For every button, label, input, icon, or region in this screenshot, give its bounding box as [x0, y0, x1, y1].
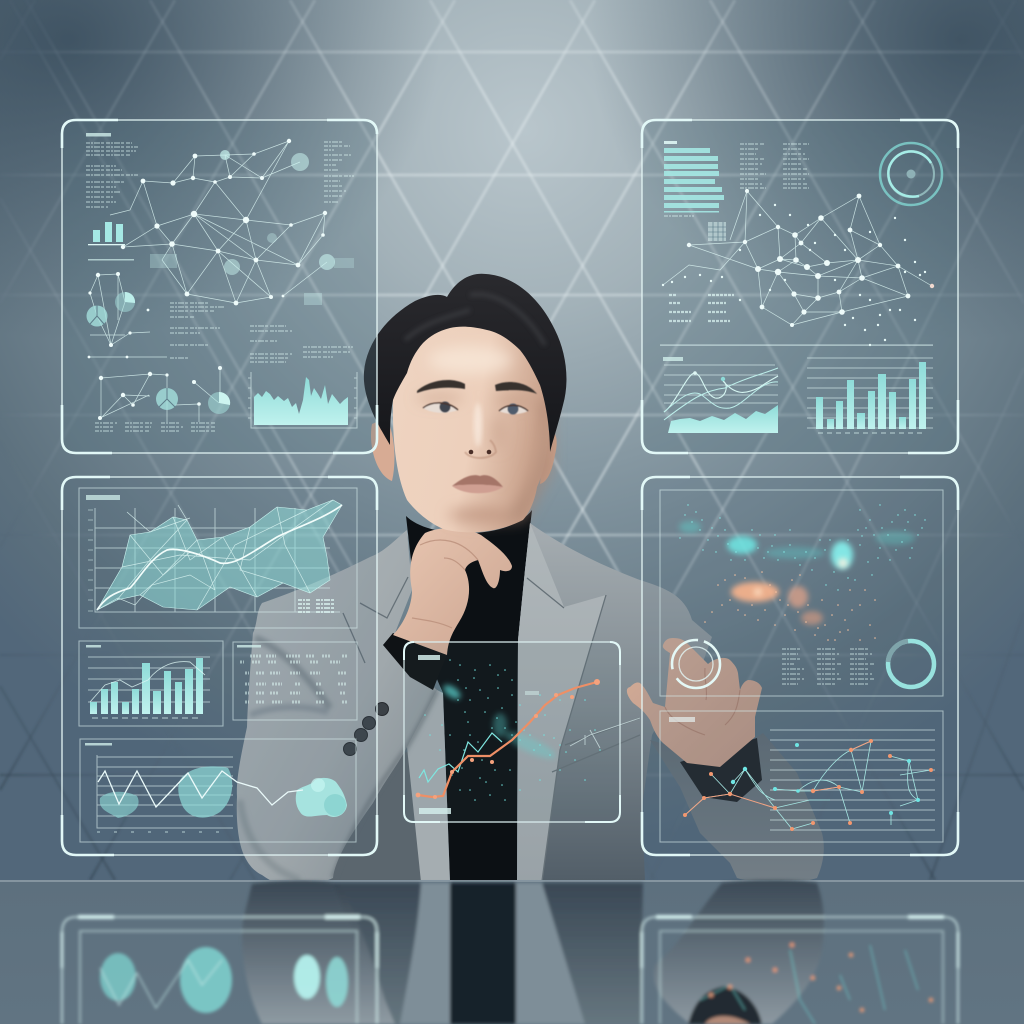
reflected torso [333, 883, 643, 1024]
panel frame [62, 120, 377, 453]
jacket fold shading [240, 638, 437, 880]
lower frame [660, 711, 943, 842]
torso right side [517, 523, 712, 881]
text columns [664, 144, 809, 216]
panel labels [418, 655, 539, 814]
small table [669, 295, 734, 321]
blob chart frame [80, 739, 356, 842]
network line chart [683, 730, 935, 831]
reflected right panel [642, 917, 958, 1024]
man [237, 274, 824, 886]
panel: top-left network [62, 120, 377, 453]
right hand [627, 638, 762, 767]
blob cluster [296, 778, 347, 817]
label [669, 717, 695, 722]
text columns [782, 649, 874, 684]
teal mesh surface [97, 500, 342, 610]
network graph [110, 139, 354, 305]
nose [465, 403, 496, 458]
reflected left panel [62, 917, 377, 1024]
panel frame [642, 477, 958, 855]
lapel lines [343, 577, 640, 881]
bar chart frame [79, 641, 223, 726]
left cuff [383, 633, 447, 690]
reflected left sleeve [242, 881, 395, 1024]
face [393, 305, 548, 532]
horizontal bars [664, 141, 724, 212]
divider [660, 344, 933, 346]
panel: bottom-right charts [642, 477, 958, 855]
small line icon [570, 718, 640, 748]
eyes [423, 402, 528, 414]
panel: top-right network [642, 120, 958, 453]
node clusters [150, 150, 354, 305]
floating centre panel [404, 642, 640, 822]
table top [0, 880, 1024, 1024]
line and area chart [663, 357, 778, 433]
reflected lapels [400, 883, 585, 1024]
reflected turtleneck [450, 883, 516, 1024]
left ear [371, 418, 394, 481]
left arm and shoulder [237, 530, 437, 886]
table reflection [62, 880, 958, 1024]
panel: bottom-left charts [62, 477, 377, 855]
ring gauge [888, 641, 934, 687]
text blocks [86, 142, 354, 431]
upper frame [660, 490, 943, 696]
particle cloud [679, 505, 925, 640]
data table frame [233, 642, 357, 720]
teal line [419, 733, 502, 782]
network graph [663, 189, 934, 345]
right cuff [680, 738, 762, 802]
turtleneck [406, 510, 532, 882]
right ear [540, 430, 557, 484]
left lapel [407, 690, 450, 882]
mouth [452, 475, 503, 493]
orange trend line [416, 679, 600, 799]
teal particles [425, 660, 600, 800]
finger ring [672, 640, 720, 688]
sleeve buttons [344, 702, 388, 756]
face shadows [416, 346, 552, 523]
panel frame [404, 642, 620, 822]
torso under forearm [330, 750, 423, 882]
left hand on chin [393, 528, 512, 655]
bar chart [88, 222, 134, 260]
left network with pie charts [86, 272, 167, 358]
right lapel [517, 523, 606, 881]
eyebrows [417, 380, 537, 394]
reflected hand [688, 986, 762, 1024]
bar chart [807, 358, 933, 433]
area chart [248, 372, 357, 428]
mesh chart frame [79, 488, 357, 628]
panel frame [642, 120, 958, 453]
ring gauge [880, 143, 942, 205]
bottom network with pie charts [98, 366, 230, 422]
reflected right sleeve [654, 880, 824, 1024]
header label [86, 133, 111, 136]
right sleeve [650, 733, 824, 882]
hair [364, 274, 566, 452]
panel frame [62, 477, 377, 855]
